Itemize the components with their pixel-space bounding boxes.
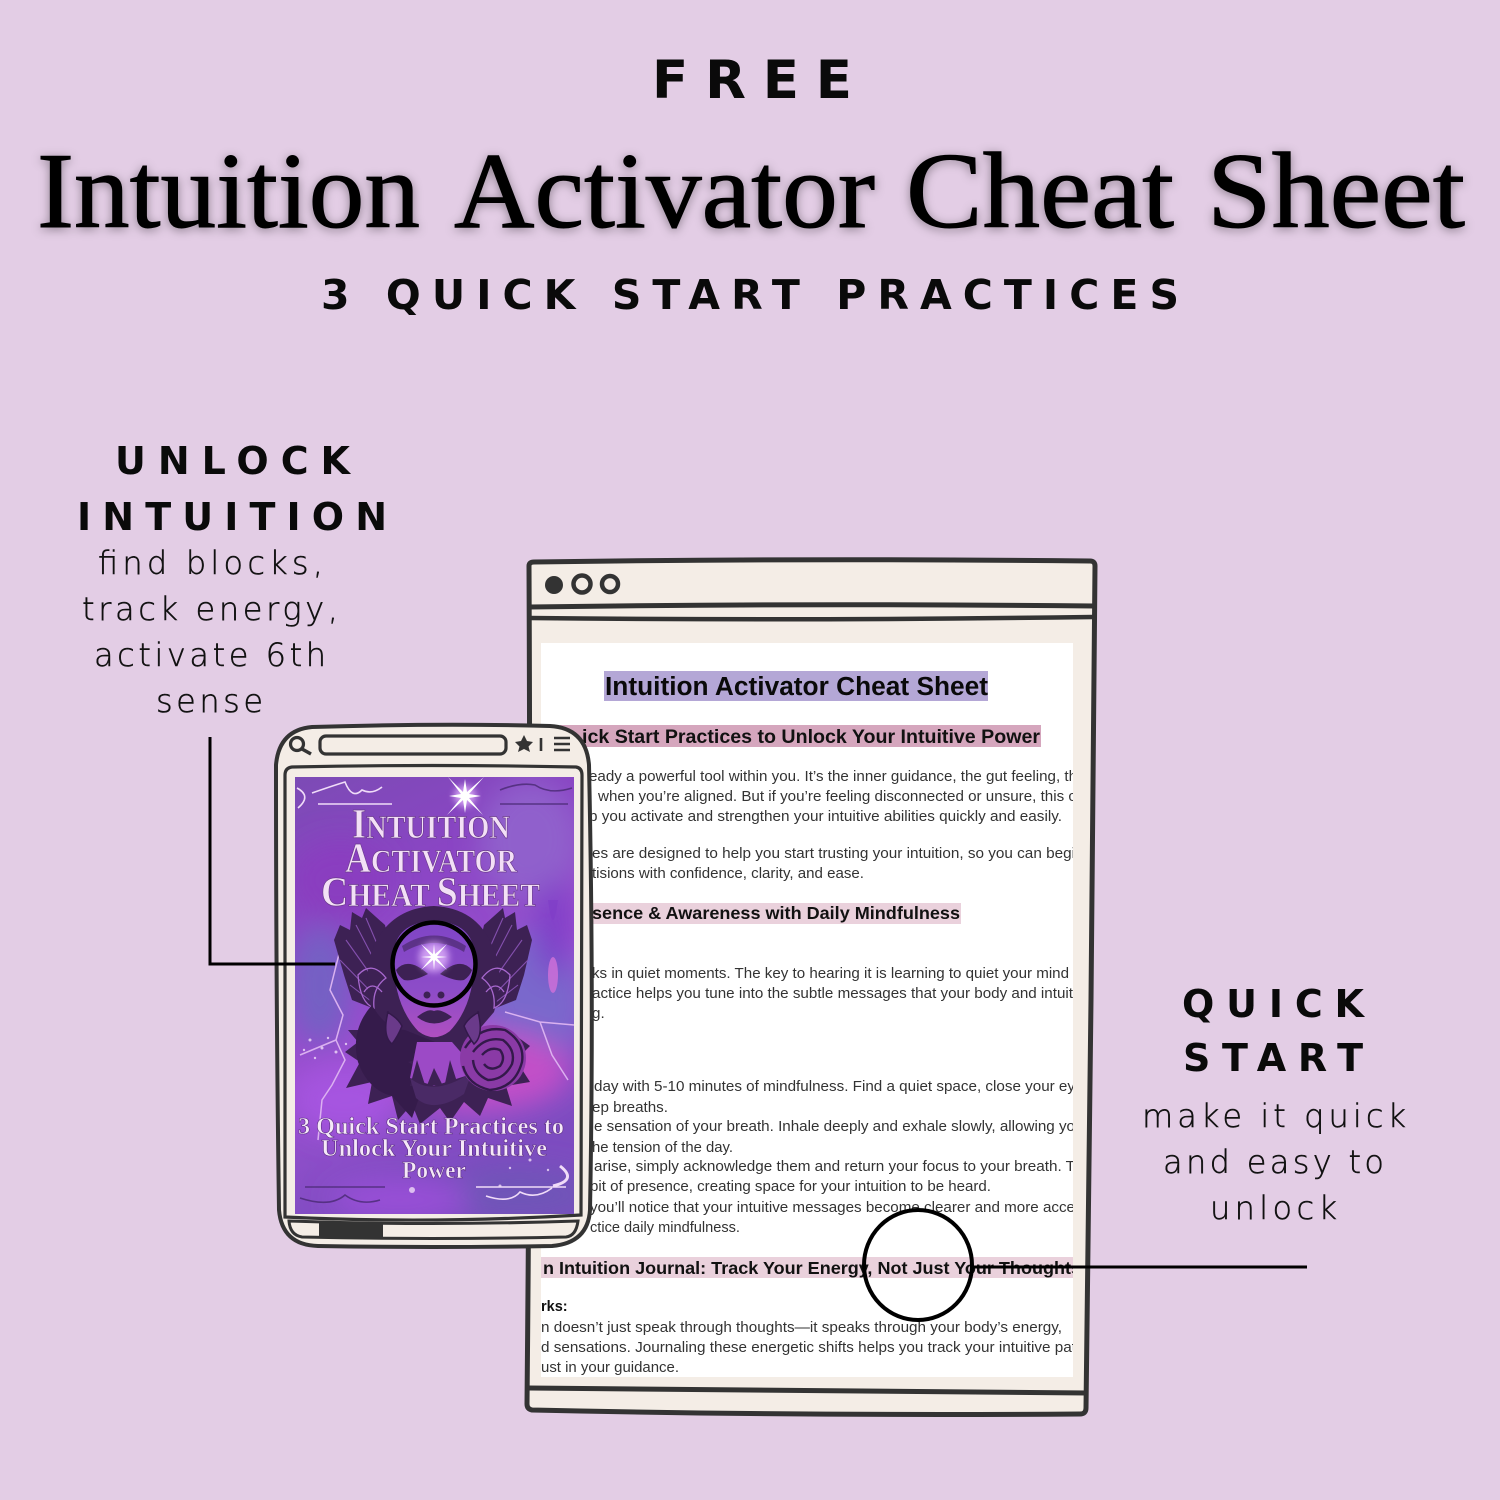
face [393, 920, 475, 1038]
callout: unlock intuition: sense [156, 682, 263, 720]
callout: unlock intuition [77, 439, 387, 720]
section one text: you’ll notice that your intuitive messages become clearer and more acce [590, 1199, 1075, 1216]
document intro text: es are designed to help you start trusting your intuition, so you can begi [592, 845, 1075, 862]
neck and chest [410, 1042, 466, 1086]
document title: Intuition Activator Cheat Sheet [605, 673, 989, 701]
woman illustration [297, 777, 572, 1202]
cover subtitle: Power [402, 1158, 466, 1184]
cover subtitle: 3 Quick Start Practices to [298, 1114, 564, 1140]
book cover [295, 777, 574, 1214]
section one text: bit of presence, creating space for your intuition to be heard. [590, 1178, 991, 1195]
section one text: ks in quiet moments. The key to hearing it is learning to quiet your mind [592, 965, 1069, 982]
callout: quick start: START [1183, 1036, 1363, 1080]
browser window mockup [527, 560, 1095, 1414]
cover title [322, 810, 540, 906]
cover title: INTUITION [352, 802, 510, 848]
document intro text [589, 768, 1077, 882]
cover subtitle [298, 1116, 564, 1178]
phone mockup [210, 725, 600, 1247]
title [37, 132, 1465, 251]
title: Activator [454, 132, 875, 251]
phone bottom bar [289, 1221, 578, 1238]
phone screen frame [285, 766, 582, 1220]
connector line: quick start [972, 1266, 1307, 1268]
connector line: unlock intuition [210, 737, 335, 964]
document page [541, 643, 1081, 1377]
callout: unlock intuition: track energy, [82, 590, 338, 628]
section two text: rks: [541, 1299, 568, 1315]
document intro text: when you’re aligned. But if you’re feeling disconnected or unsure, this c [597, 788, 1076, 805]
section two text: ust in your guidance. [541, 1359, 679, 1376]
callout: unlock intuition: find blocks, [98, 544, 323, 582]
rear spiked leaves [345, 1030, 530, 1124]
callout: quick start: make it quick [1142, 1097, 1406, 1135]
right wing [483, 908, 532, 1008]
section one text: arise, simply acknowledge them and return your focus to your breath. T [594, 1158, 1075, 1175]
document subheading: ick Start Practices to Unlock Your Intuitive Power [582, 726, 1040, 748]
section one text: he tension of the day. [592, 1139, 733, 1156]
chest shadows [410, 1060, 456, 1086]
top star [447, 777, 484, 815]
left wing [334, 908, 386, 1008]
title: Sheet [1207, 132, 1465, 251]
title: Cheat [906, 132, 1174, 251]
section one text: day with 5-10 minutes of mindfulness. Find a quiet space, close your ey [594, 1078, 1075, 1095]
callout: quick start: unlock [1210, 1189, 1337, 1227]
document intro text: eady a powerful tool within you. It’s the inner guidance, the gut feeling, th [589, 768, 1077, 785]
section two text [541, 1299, 1077, 1376]
magnifier circle on document [864, 1210, 972, 1320]
cover star dust [303, 1037, 549, 1193]
section one text [590, 965, 1075, 1236]
title: Intuition [37, 132, 420, 251]
section one text: ep breaths. [592, 1099, 668, 1116]
dark cover ornaments [300, 784, 572, 1202]
magnifier circle on third eye [392, 922, 476, 1006]
section one text: actice helps you tune into the subtle messages that your body and intuit [592, 985, 1074, 1002]
callout: unlock intuition: activate 6th [94, 636, 326, 674]
cover lightning [300, 950, 574, 1140]
section two text: n doesn’t just speak through thoughts—it speaks through your body’s energy, [541, 1319, 1062, 1336]
cover ornaments [297, 782, 568, 1199]
subtitle: 3 QUICK START PRACTICES [321, 271, 1179, 319]
section one text: g. [592, 1005, 605, 1022]
callout: unlock intuition: UNLOCK [115, 439, 352, 483]
callout: quick start: QUICK [1182, 982, 1366, 1026]
section two text: d sensations. Journaling these energetic shifts helps you track your intuitive pat [541, 1339, 1077, 1356]
cover title: CHEAT SHEET [321, 870, 540, 916]
cover colour clouds [295, 777, 574, 1214]
cover drip [548, 900, 558, 993]
section heading: presence and awareness: sence & Awareness with Daily Mindfulness [592, 903, 960, 923]
section one text: e sensation of your breath. Inhale deeply and exhale slowly, allowing yo [594, 1118, 1075, 1135]
third eye star [419, 942, 449, 972]
cover subtitle: Unlock Your Intuitive [321, 1136, 547, 1162]
heading: FREE: FREE [652, 50, 852, 111]
phone menu icon [541, 738, 570, 751]
facial features [396, 936, 472, 1024]
left hair mass [356, 1005, 440, 1118]
section one text: ctice daily mindfulness. [590, 1219, 740, 1236]
callout: unlock intuition: INTUITION [77, 495, 387, 539]
callout: quick start: and easy to [1163, 1143, 1384, 1181]
phone search icon [290, 738, 311, 754]
necklace [410, 1076, 469, 1105]
browser window buttons [545, 576, 618, 594]
document intro text: p you activate and strengthen your intuitive abilities quickly and easily. [589, 808, 1062, 825]
side flowers [358, 968, 510, 1008]
cover title: ACTIVATOR [345, 836, 518, 882]
rose [460, 1025, 526, 1091]
phone star icon [515, 735, 533, 752]
phone address bar [320, 736, 506, 754]
earrings [386, 1012, 480, 1044]
section heading: intuition journal: n Intuition Journal: Track Your Energy, Not Just Your Thoughts [543, 1258, 1081, 1278]
callout: quick start [1142, 982, 1406, 1227]
document intro text: tisions with confidence, clarity, and ease. [592, 865, 864, 882]
crown hair [367, 906, 500, 1040]
